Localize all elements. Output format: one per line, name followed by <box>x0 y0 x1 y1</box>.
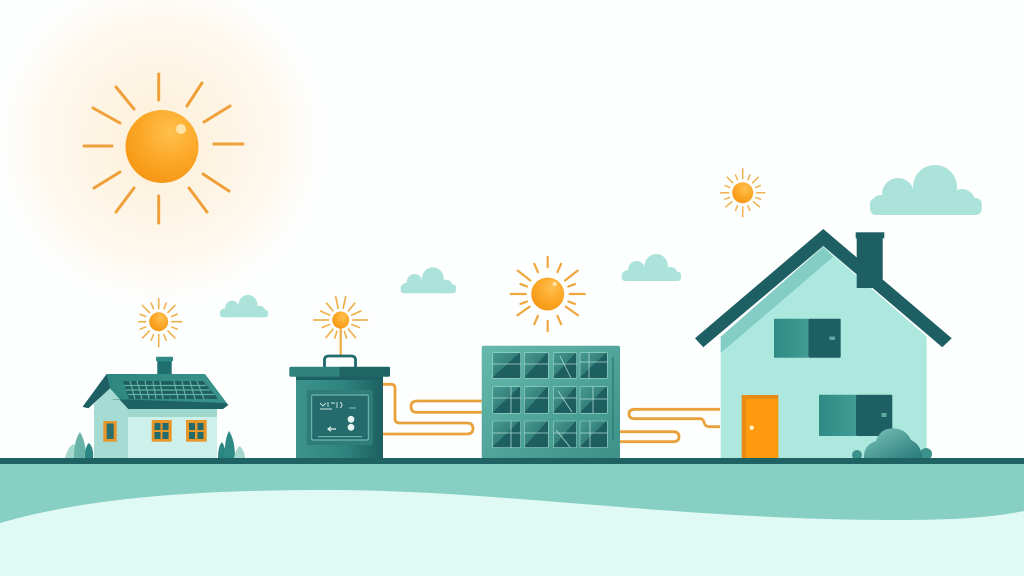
cottage roof <box>83 374 228 409</box>
lower window <box>819 395 892 436</box>
cloud: left small <box>220 295 268 317</box>
solar panel cells <box>493 353 607 448</box>
cottage chimney <box>156 357 173 376</box>
wires: battery to solar panel <box>383 384 482 434</box>
bush <box>852 428 932 460</box>
small sun above battery <box>314 297 368 355</box>
small sun above house <box>721 169 765 217</box>
battery handle <box>324 356 356 367</box>
chimney <box>856 232 884 288</box>
large house <box>695 229 952 460</box>
ground line <box>0 458 1024 464</box>
battery control panel <box>307 390 373 445</box>
door <box>742 395 778 458</box>
house walls <box>721 247 927 458</box>
sun glow <box>0 0 335 315</box>
medium sun above solar panel <box>511 257 585 331</box>
house roof <box>695 229 952 347</box>
large sun <box>84 74 243 223</box>
plants: right of cottage <box>218 431 245 458</box>
small sun above cottage <box>139 299 182 347</box>
solar panel <box>482 346 620 459</box>
battery lid <box>289 367 390 377</box>
cottage <box>65 357 245 458</box>
upper window <box>774 319 841 358</box>
cottage windows <box>103 420 207 442</box>
foreground hill <box>0 490 1024 576</box>
wires: solar panel to house <box>620 409 720 442</box>
ground band <box>0 462 1024 576</box>
cloud: top right <box>870 165 982 215</box>
battery body <box>296 376 383 459</box>
cloud: centre left <box>401 267 456 293</box>
cottage walls <box>94 386 128 458</box>
rooftop solar panels <box>123 381 218 399</box>
roof underside shade <box>721 247 833 353</box>
battery <box>289 356 390 459</box>
cloud: centre right <box>622 254 681 281</box>
plants: left of cottage <box>65 432 93 458</box>
